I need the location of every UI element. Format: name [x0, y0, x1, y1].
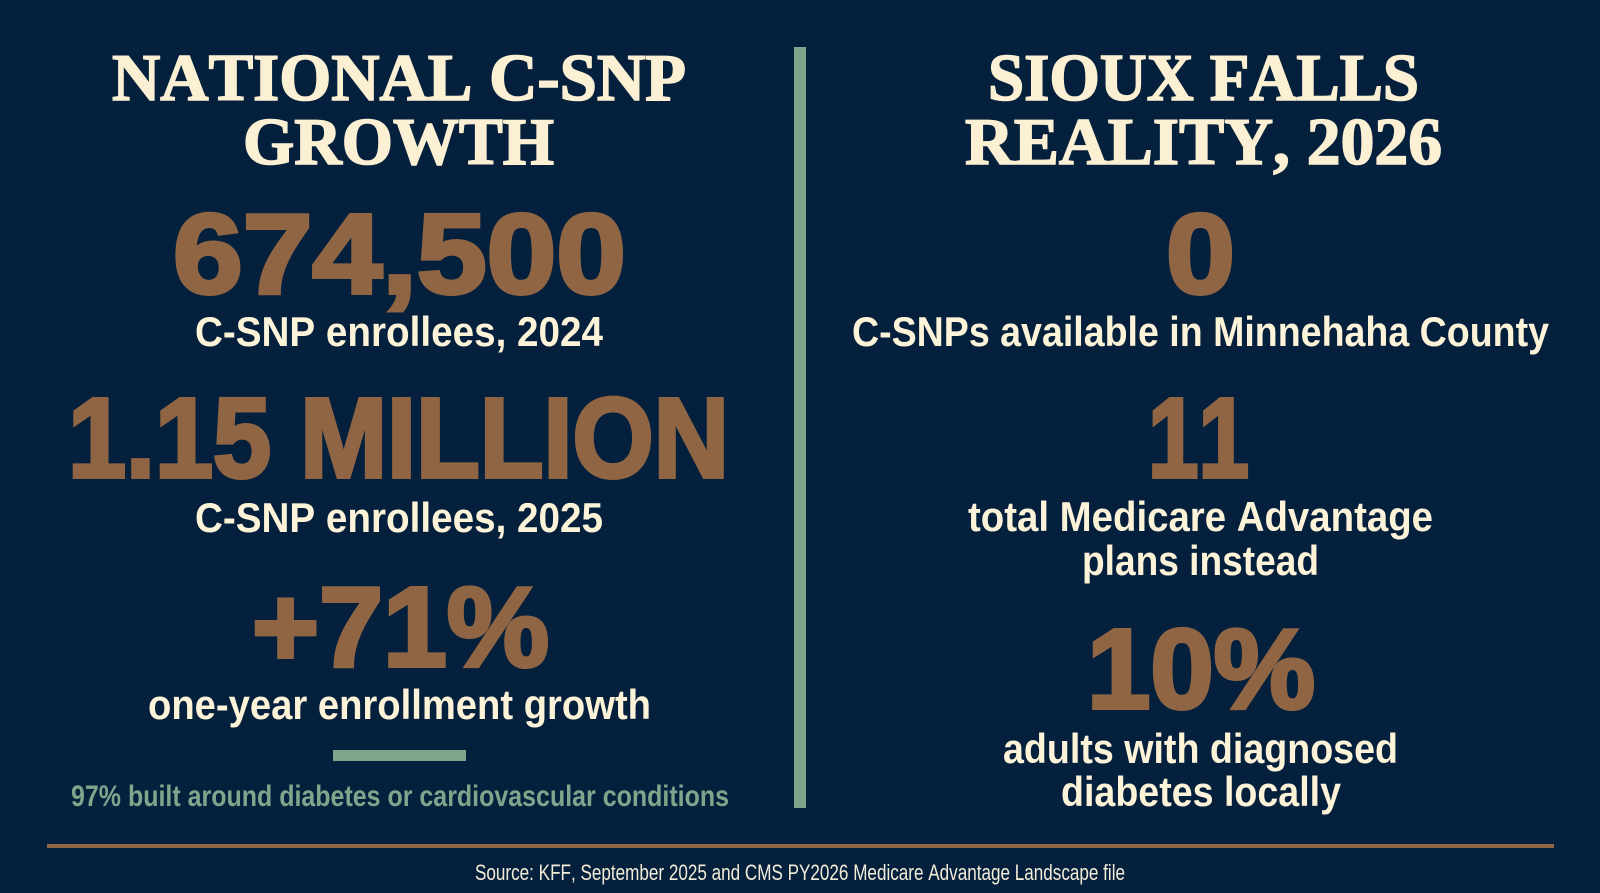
- label: enrollees 2024: C-SNP enrollees, 2024: [195, 308, 604, 355]
- label: one-year growth: one-year enrollment growth: [148, 681, 651, 728]
- stat: 674,500: 674,500: [173, 191, 626, 317]
- label: enrollees 2025: C-SNP enrollees, 2025: [195, 494, 603, 541]
- heading: national C-SNP growth: NATIONAL C-SNP: [112, 41, 686, 115]
- label: total Medicare Advantage plans: [968, 493, 1433, 584]
- stat: 1.15 million: 1.15 MILLION: [68, 375, 729, 501]
- stat: 11: 11: [1148, 375, 1249, 501]
- footer rule: [47, 844, 1554, 848]
- panel: Sioux Falls reality: [852, 41, 1550, 815]
- heading: national C-SNP growth: GROWTH: [243, 105, 554, 179]
- center divider: [794, 47, 806, 808]
- label: total Medicare Advantage plans: total Medicare Advantage: [968, 493, 1433, 540]
- accent bar: [333, 750, 466, 761]
- stat: +71%: +71%: [252, 564, 549, 690]
- stat: 10%: 10%: [1087, 606, 1315, 732]
- label: total Medicare Advantage plans: plans instead: [1082, 537, 1319, 584]
- heading: Sioux Falls reality 2026: [965, 41, 1442, 179]
- label: adults with diabetes: diabetes locally: [1061, 768, 1342, 815]
- label: adults with diabetes: adults with diagnosed: [1003, 725, 1398, 772]
- label: adults with diabetes: [1003, 725, 1398, 815]
- heading: national C-SNP growth: [112, 41, 686, 179]
- note: 97% built around conditions: 97% built around diabetes or cardiovascular conditions: [71, 780, 729, 813]
- heading: Sioux Falls reality 2026: SIOUX FALLS: [988, 41, 1419, 115]
- source note: Source: KFF, September 2025 and CMS PY2026 Medicare Advantage Landscape file: [475, 860, 1125, 885]
- heading: Sioux Falls reality 2026: REALITY, 2026: [965, 105, 1442, 179]
- stat: 0: 0: [1166, 191, 1235, 317]
- panel: national C-SNP growth: [68, 41, 729, 813]
